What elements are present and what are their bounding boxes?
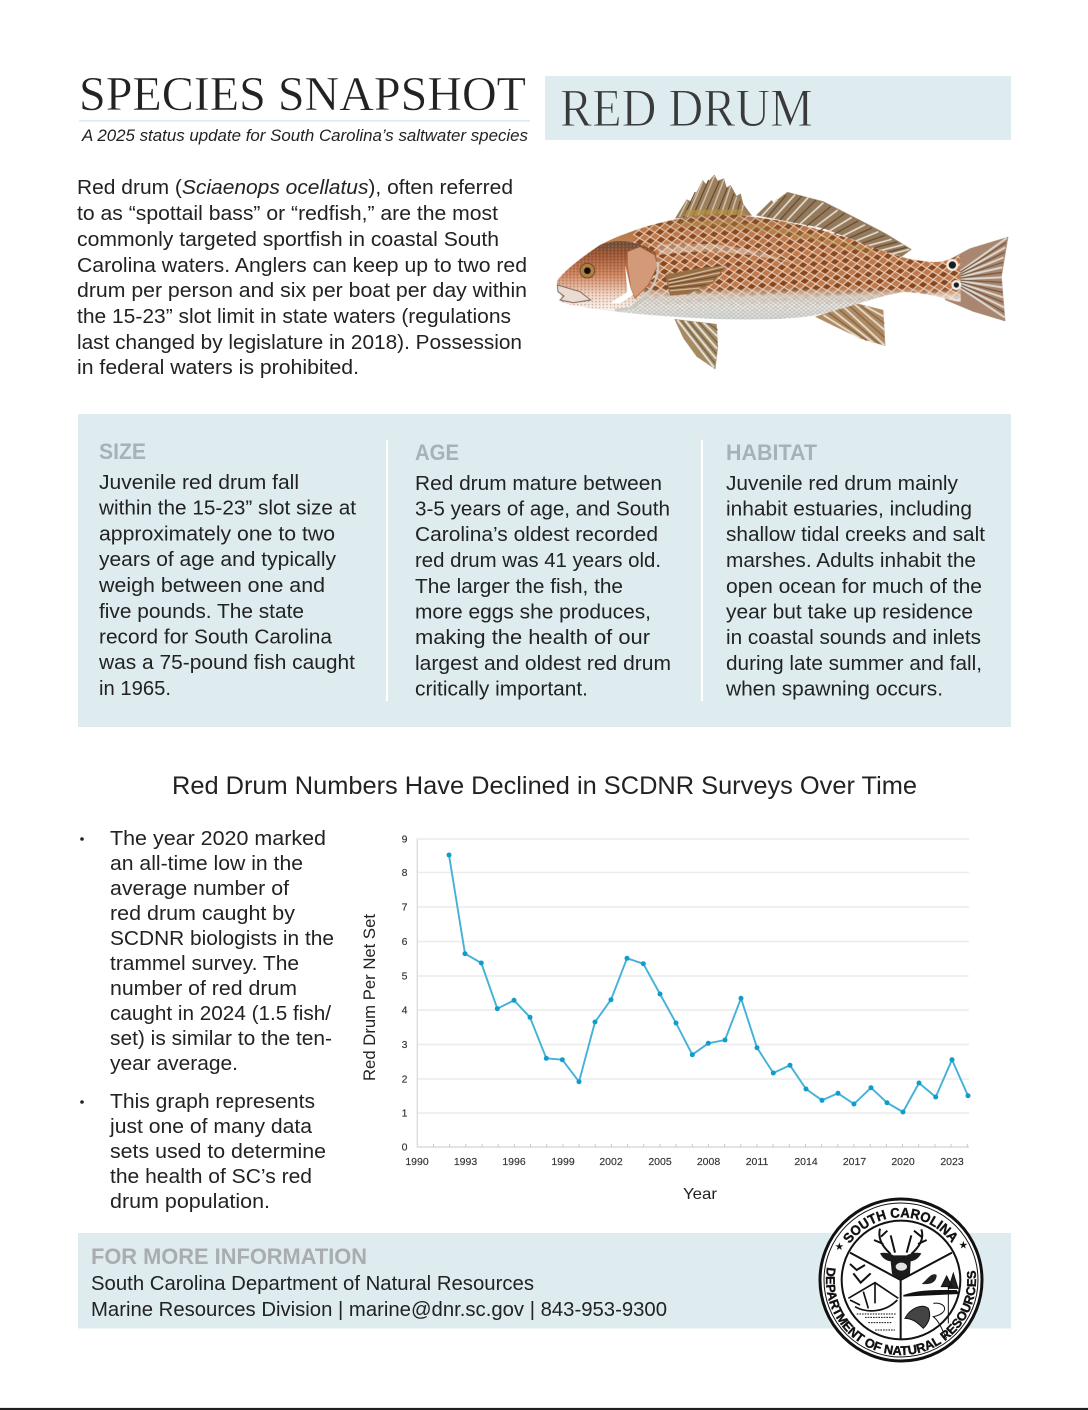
- intro paragraph: Carolina waters. Anglers can keep up to two red: [77, 254, 527, 277]
- seal right star: ★: [959, 1240, 969, 1252]
- age column: 3-5 years of age, and South: [415, 498, 670, 520]
- icon: marsh and trees: [903, 1273, 959, 1323]
- line chart: [361, 834, 970, 1203]
- y axis labels: 7: [402, 902, 408, 914]
- habitat column: in coastal sounds and inlets: [726, 626, 981, 649]
- bullet one: year average.: [110, 1053, 238, 1075]
- x axis title: Year: [683, 1186, 718, 1203]
- seal top text: SOUTH CAROLINA: [844, 1208, 957, 1244]
- bullet two: just one of many data: [109, 1116, 313, 1138]
- x axis labels: 2017: [843, 1156, 866, 1168]
- icon: fish: [905, 1303, 947, 1338]
- habitat column: during late summer and fall,: [726, 652, 982, 675]
- size column: years of age and typically: [99, 548, 337, 571]
- data line: [449, 855, 968, 1112]
- second dorsal fin: [756, 192, 912, 257]
- bullet one: The year 2020 marked: [110, 828, 326, 850]
- intro paragraph: [77, 176, 527, 379]
- bullet one: an all-time low in the: [110, 853, 303, 875]
- bullet one: average number of: [110, 878, 289, 900]
- bullet two: This graph represents: [110, 1091, 315, 1113]
- habitat column: Juvenile red drum mainly: [726, 472, 959, 495]
- intro paragraph: in federal waters is prohibited.: [77, 356, 359, 379]
- fish head: [557, 240, 660, 312]
- age column: AGE: [415, 440, 459, 465]
- intro paragraph: drum per person and six per boat per day within: [77, 279, 527, 302]
- age column: making the health of our: [415, 626, 650, 649]
- pectoral fin: [665, 265, 727, 296]
- x axis labels: 2008: [697, 1156, 720, 1168]
- chart heading: Red Drum Numbers Have Declined in SCDNR Surveys Over Time: [172, 772, 917, 800]
- habitat column: [725, 440, 985, 700]
- x axis labels: 2014: [794, 1156, 818, 1168]
- age column: [415, 440, 671, 700]
- icon: deer: [874, 1229, 927, 1280]
- intro paragraph: Red drum (Sciaenops ocellatus), often referred: [77, 176, 513, 199]
- first dorsal fin: [675, 175, 752, 218]
- intro paragraph: the 15-23” slot limit in state waters (regulations: [77, 305, 511, 328]
- age column: Red drum mature between: [415, 472, 662, 495]
- eye: [580, 263, 595, 278]
- x axis labels: 1999: [551, 1156, 575, 1168]
- habitat column: shallow tidal creeks and salt: [726, 523, 985, 546]
- bullet two: drum population.: [110, 1191, 270, 1213]
- age column: Carolina’s oldest recorded: [415, 523, 658, 546]
- habitat column: year but take up residence: [726, 600, 973, 624]
- gill cover: [627, 247, 657, 298]
- panel: species facts: [78, 414, 1011, 727]
- x axis labels: 1990: [405, 1156, 429, 1168]
- panel: more information: Marine Resources Division | marine@dnr.sc.gov | 843-953-9300: [91, 1298, 667, 1321]
- size column: [98, 439, 356, 700]
- age column: more eggs she produces,: [415, 600, 651, 624]
- y axis labels: 8: [402, 867, 408, 879]
- size column: weigh between one and: [98, 574, 325, 597]
- age column: The larger the fish, the: [415, 575, 623, 598]
- age column: critically important.: [415, 678, 588, 700]
- x axis labels: 1993: [454, 1156, 477, 1168]
- x axis labels: [405, 1156, 964, 1168]
- habitat column: marshes. Adults inhabit the: [726, 549, 976, 572]
- y axis labels: 6: [402, 936, 408, 948]
- fish body: [557, 214, 961, 319]
- bullet one: red drum caught by: [110, 903, 295, 925]
- bullet two: [80, 1091, 326, 1213]
- habitat column: open ocean for much of the: [726, 575, 982, 598]
- illustration: red drum fish: [557, 175, 1008, 369]
- x axis labels: 2005: [648, 1156, 672, 1168]
- seal left star: ★: [835, 1241, 845, 1253]
- seal bottom text: DEPARTMENT OF NATURAL RESOURCES: [826, 1268, 976, 1356]
- logo: SCDNR seal: [818, 1198, 984, 1362]
- panel: more information: FOR MORE INFORMATION: [91, 1244, 367, 1269]
- size column: record for South Carolina: [99, 626, 333, 648]
- x axis labels: 1996: [502, 1156, 526, 1168]
- x axis labels: 2002: [599, 1156, 623, 1168]
- species name banner: [545, 76, 1011, 140]
- species name banner: RED DRUM: [560, 78, 813, 138]
- subtitle: A 2025 status update for South Carolina’s saltwater species: [81, 126, 528, 145]
- panel: more information: [78, 1233, 1011, 1328]
- tail fin: [945, 237, 1008, 321]
- fish scales: [617, 213, 962, 322]
- size column: was a 75-pound fish caught: [98, 651, 355, 674]
- age column: red drum was 41 years old.: [415, 549, 661, 572]
- x axis labels: 2020: [891, 1156, 915, 1168]
- data points: [446, 852, 970, 1114]
- habitat column: HABITAT: [726, 440, 818, 465]
- y axis labels: 0: [402, 1142, 408, 1154]
- tail spots: [946, 259, 961, 290]
- y axis title: Red Drum Per Net Set: [361, 914, 379, 1081]
- y axis labels: 9: [402, 834, 408, 846]
- bullet one: caught in 2024 (1.5 fish/: [110, 1003, 331, 1025]
- bullet one: [80, 828, 334, 1075]
- y axis labels: [402, 834, 408, 1154]
- bullet two: sets used to determine: [110, 1141, 326, 1163]
- anal fin: [815, 303, 885, 346]
- mouth: [557, 285, 591, 303]
- title: SPECIES SNAPSHOT: [79, 66, 526, 121]
- y axis labels: 2: [402, 1074, 408, 1086]
- bullet one: trammel survey. The: [110, 953, 299, 975]
- size column: within the 15-23” slot size at: [98, 496, 356, 520]
- x axis labels: 2023: [940, 1156, 964, 1168]
- intro paragraph: to as “spottail bass” or “redfish,” are the most: [77, 202, 498, 225]
- intro paragraph: commonly targeted sportfish in coastal South: [77, 228, 499, 251]
- size column: Juvenile red drum fall: [99, 471, 299, 494]
- bottom edge line: [0, 1407, 1088, 1408]
- size column: five pounds. The state: [99, 600, 304, 623]
- bullet list: [80, 828, 334, 1213]
- size column: in 1965.: [99, 677, 171, 700]
- x axis labels: 2011: [746, 1156, 768, 1168]
- bullet one: number of red drum: [110, 978, 297, 1000]
- panel: more information: South Carolina Department of Natural Resources: [91, 1272, 534, 1295]
- habitat column: inhabit estuaries, including: [726, 498, 972, 520]
- age column: largest and oldest red drum: [415, 652, 671, 675]
- icon: shrimp boat: [848, 1283, 898, 1330]
- icon: birds: [850, 1264, 871, 1283]
- y axis labels: 3: [402, 1039, 408, 1051]
- seal dividers: [850, 1253, 952, 1339]
- y axis labels: 1: [402, 1108, 408, 1120]
- intro paragraph: last changed by legislature in 2018). Possession: [77, 331, 522, 354]
- habitat column: when spawning occurs.: [725, 678, 943, 700]
- bullet one: SCDNR biologists in the: [110, 928, 334, 950]
- y axis labels: 5: [402, 970, 408, 982]
- pelvic fin: [674, 319, 718, 369]
- size column: SIZE: [99, 439, 146, 464]
- bullet two: the health of SC’s red: [110, 1166, 312, 1188]
- y axis labels: 4: [402, 1004, 408, 1016]
- size column: approximately one to two: [99, 522, 335, 546]
- bullet one: set) is similar to the ten-: [110, 1028, 332, 1050]
